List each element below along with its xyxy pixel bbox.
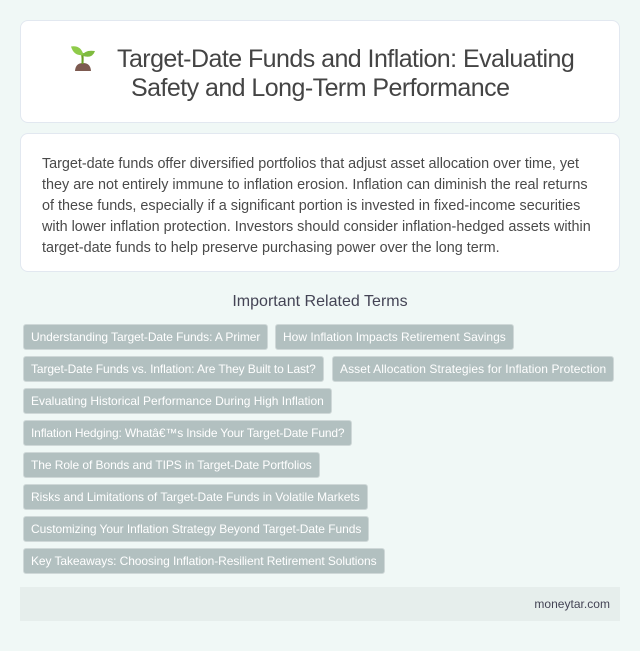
text: Key Takeaways: Choosing Inflation-Resilient Retirement Solutions: [31, 554, 377, 568]
text: Understanding Target-Date Funds: A Primer: [31, 330, 260, 344]
footer source: moneytar.com: [534, 597, 610, 611]
intro text: [42, 156, 591, 256]
text: with lower inflation protection. Investors should consider inflation-hedged assets within: [42, 219, 591, 235]
text: Risks and Limitations of Target-Date Funds in Volatile Markets: [31, 490, 360, 504]
text: Target-date funds offer diversified portfolios that adjust asset allocation over time, yet: [42, 156, 579, 172]
icon: seedling: [71, 46, 95, 71]
text: target-date funds to help preserve purchasing power over the long term.: [42, 240, 500, 256]
footer bar: [20, 587, 620, 621]
text: of these funds, especially if a significant portion is invested in fixed-income securities: [42, 198, 580, 214]
text: How Inflation Impacts Retirement Savings: [283, 330, 506, 344]
section heading: Important Related Terms: [232, 293, 408, 310]
title: [117, 45, 574, 102]
header card: Safety and Long-Term Performance: [131, 74, 509, 102]
text: Customizing Your Inflation Strategy Beyond Target-Date Funds: [31, 522, 361, 536]
text: Inflation Hedging: Whatâ€™s Inside Your Target-Date Fund?: [31, 426, 344, 440]
text: they are not entirely immune to inflation erosion. Inflation can diminish the real returns: [42, 177, 588, 193]
header card: Target-Date Funds and Inflation: Evaluating: [117, 45, 574, 73]
text: The Role of Bonds and TIPS in Target-Date Portfolios: [31, 458, 312, 472]
header card: [20, 20, 620, 123]
text: Target-Date Funds vs. Inflation: Are They Built to Last?: [31, 362, 316, 376]
intro card: [20, 133, 620, 272]
text: Asset Allocation Strategies for Inflation Protection: [340, 362, 606, 376]
tag list: [23, 324, 614, 574]
text: Evaluating Historical Performance During High Inflation: [31, 394, 324, 408]
